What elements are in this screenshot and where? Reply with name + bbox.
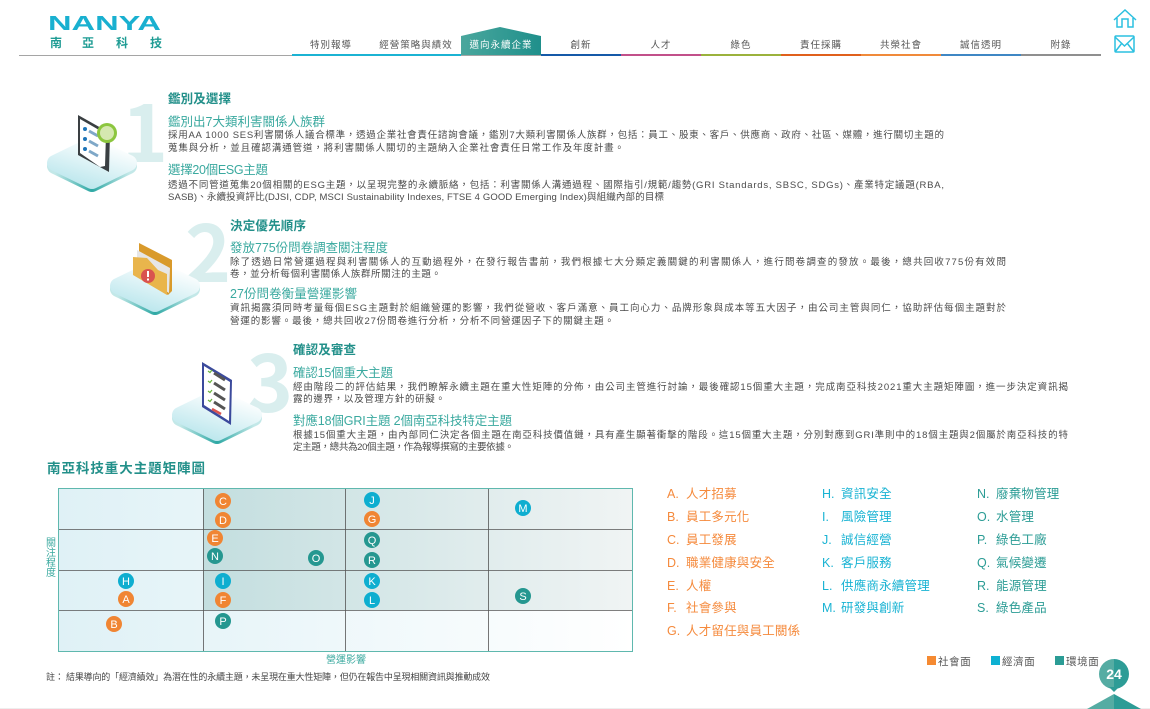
logo: [48, 13, 162, 50]
legend list: social topics: 員工發展: [686, 532, 737, 547]
legend list: economic topics: I.: [822, 510, 829, 524]
section 2: prioritise: [118, 193, 1006, 327]
bubble letters: L: [369, 595, 375, 607]
logo: NANYA: [48, 13, 161, 35]
bubble letters: D: [219, 515, 227, 527]
questionnaire text block: 除了透過日常營運過程與利害關係人的互動過程外，在發行報告書前，我們根據七大分類定義關鍵的利害關係人，進行問卷調查的發放。最後，總共回收775份有效問: [230, 256, 1006, 268]
large numeral 2: 2: [185, 193, 231, 305]
navigation bar: 特別報導: [310, 39, 352, 51]
large numeral 3: 3: [247, 323, 293, 435]
questionnaire text block: 卷，並分析每個利害關係人族群所關注的主題。: [230, 268, 441, 280]
bubble letters: F: [220, 595, 227, 607]
bubble letters: S: [519, 591, 527, 603]
icon: mail: [1115, 36, 1134, 52]
bubble letters: C: [219, 496, 227, 508]
legend list: social topics: 社會參與: [686, 600, 737, 615]
legend list: economic topics: K.: [822, 556, 834, 570]
bubble letters: O: [312, 553, 321, 565]
legend list: environmental topics: N.: [977, 487, 990, 501]
bubble letters: J: [369, 495, 375, 507]
stakeholder text block: 採用AA 1000 SES利害關係人議合標準，透過企業社會責任諮詢會議，鑑別7大類利害關係人族群，包括：員工、股東、客戶、供應商、政府、社區、媒體，進行關切主題的: [168, 129, 944, 141]
bubble letters: M: [518, 503, 528, 515]
ESG topics text block: 透過不同管道蒐集20個相關的ESG主題，以呈現完整的永續脈絡，包括：利害關係人溝通過程、國際指引/規範/趨勢(GRI Standards, SBSC, SDGs)、產業特定議題(RBA,: [168, 179, 944, 191]
bubbles: environmental: [207, 532, 531, 629]
icon: home: [1114, 10, 1136, 27]
bubble letters: P: [219, 616, 227, 628]
navigation bar: 人才: [650, 39, 672, 51]
bubble letters: A: [122, 594, 130, 606]
questionnaire text block: [230, 240, 1006, 280]
logo: 亞: [82, 36, 94, 50]
x axis label: 營運影響: [326, 653, 366, 666]
legend list: economic topics: [822, 486, 930, 615]
bubble letters: E: [211, 533, 219, 545]
y axis label: 關: [46, 537, 56, 549]
legend list: environmental topics: 綠色產品: [996, 600, 1047, 615]
page number marker: 24: [1106, 666, 1122, 682]
legend list: economic topics: 風險管理: [841, 509, 892, 524]
legend list: economic topics: 誠信經營: [841, 533, 892, 547]
colour key: 經濟面: [1002, 655, 1035, 668]
legend list: environmental topics: 能源管理: [996, 578, 1047, 593]
materiality matrix chart: [58, 488, 632, 652]
colour key: [927, 655, 1099, 668]
legend list: social topics: G.: [667, 624, 680, 638]
legend list: environmental topics: 綠色工廠: [996, 532, 1047, 547]
legend list: social topics: 人才留任與員工關係: [686, 623, 800, 638]
legend list: environmental topics: S.: [977, 601, 989, 615]
colour key: 環境面: [1066, 655, 1099, 668]
bubble letters: I: [221, 576, 225, 588]
legend list: economic topics: 研發與創新: [841, 600, 905, 615]
navigation bar: 共榮社會: [880, 39, 922, 51]
ESG topics text block: SASB)、永續投資評比(DJSI, CDP, MSCI Sustainability Indexes, FTSE 4 GOOD Emerging Index)與組織內部的目標: [168, 191, 664, 203]
bubble letters: H: [122, 576, 130, 588]
legend list: social topics: B.: [667, 510, 679, 524]
stakeholder text block: 鑑別出7大類利害關係人族群: [168, 114, 325, 129]
legend list: economic topics: H.: [822, 487, 834, 501]
bubble letters: Q: [368, 535, 377, 547]
material topics text block: 露的邊界，以及管理方針的研擬。: [293, 393, 445, 405]
legend list: environmental topics: 氣候變遷: [996, 555, 1047, 570]
heading: 鑑別及選擇: [168, 91, 231, 106]
y axis label: 注: [46, 546, 56, 559]
business impact text block: 資訊揭露須同時考量每個ESG主題對於組織營運的影響，我們從營收、客戶滿意、員工向心力、品牌形象與成本等五大因子，由公司主管與同仁，協助評估每個主題對於: [230, 302, 1006, 314]
business impact text block: 27份問卷衡量營運影響: [230, 286, 357, 301]
bubble letters: [110, 495, 528, 631]
heading: 決定優先順序: [230, 218, 306, 233]
bubbles: economic: [118, 492, 531, 608]
stakeholder text block: 蒐集與分析，並且確認溝通管道，將利害關係人關切的主題納入企業社會責任日常工作及年度計畫。: [168, 142, 624, 154]
legend list: environmental topics: [977, 486, 1060, 615]
footnote: 註： 結果導向的「經濟績效」為潛在性的永續主題，未呈現在重大性矩陣，但仍在報告中呈現相關資訊與推動成效: [46, 671, 490, 682]
colour key: 社會面: [938, 655, 971, 668]
legend list: social topics: 人權: [686, 579, 711, 593]
legend list: environmental topics: P.: [977, 533, 987, 547]
legend list: environmental topics: 水管理: [996, 509, 1034, 524]
bubble letters: B: [110, 619, 118, 631]
legend list: social topics: A.: [667, 487, 679, 501]
legend list: economic topics: J.: [822, 533, 832, 547]
questionnaire text block: 發放775份問卷調查關注程度: [230, 240, 388, 255]
legend list: economic topics: L.: [822, 579, 832, 593]
legend list: social topics: F.: [667, 601, 677, 615]
GRI topics text block: [293, 413, 1068, 453]
navigation bar: 附錄: [1050, 39, 1072, 51]
icon: platform with checklist tablet: [55, 115, 129, 184]
navigation bar: 綠色: [730, 39, 752, 51]
icon: platform with folder: [118, 243, 192, 307]
section 1: identify and select: [55, 73, 944, 203]
bubble letters: K: [368, 576, 376, 588]
material topics text block: 確認15個重大主題: [293, 365, 393, 380]
navigation bar: 誠信透明: [960, 39, 1002, 51]
navigation bar: 創新: [570, 39, 592, 51]
GRI topics text block: 定主題，總共為20個主題，作為報導撰寫的主要依據。: [293, 441, 514, 453]
bubble letters: R: [368, 555, 376, 567]
navigation bar: 責任採購: [800, 39, 842, 51]
GRI topics text block: 對應18個GRI主題 2個南亞科技特定主題: [293, 413, 512, 428]
section 3: confirm and review: [180, 323, 1068, 453]
legend list: economic topics: 供應商永續管理: [841, 578, 930, 593]
matrix title: 南亞科技重大主題矩陣圖: [47, 460, 205, 476]
stakeholder text block: [168, 114, 944, 154]
legend list: social topics: E.: [667, 579, 679, 593]
legend list: social topics: C.: [667, 533, 680, 547]
navigation bar: 邁向永續企業: [469, 39, 533, 51]
ESG topics text block: 選擇20個ESG主題: [168, 162, 268, 177]
logo: 技: [150, 35, 162, 50]
navigation bar: 經營策略與績效: [379, 39, 453, 51]
heading: 確認及審查: [293, 342, 356, 357]
legend list: economic topics: M.: [822, 601, 836, 615]
legend list: environmental topics: R.: [977, 579, 990, 593]
GRI topics text block: 根據15個重大主題，由內部同仁決定各個主題在南亞科技價值鏈，具有產生顯著衝擊的階段。這15個重大主題，分別對應到GRI準則中的18個主題與2個屬於南亞科技的特: [293, 429, 1068, 441]
business impact text block: [230, 286, 1006, 327]
logo: 科: [116, 35, 128, 50]
logo: 南: [50, 36, 62, 50]
legend list: social topics: [667, 487, 800, 638]
ESG topics text block: [168, 162, 944, 203]
legend list: social topics: 職業健康與安全: [686, 555, 775, 570]
legend list: economic topics: 客戶服務: [841, 555, 892, 570]
legend list: environmental topics: Q.: [977, 556, 990, 570]
business impact text block: 營運的影響。最後，總共回收27份問卷進行分析，分析不同營運因子下的關鍵主題。: [230, 315, 614, 327]
material topics text block: [293, 365, 1068, 405]
y axis label: [46, 537, 56, 579]
page number marker: [0, 659, 1150, 709]
navigation bar: [19, 27, 1101, 56]
legend list: social topics: D.: [667, 556, 680, 570]
legend list: social topics: 人才招募: [686, 487, 737, 501]
legend list: economic topics: 資訊安全: [841, 486, 892, 501]
material topics text block: 經由階段二的評估結果，我們瞭解永續主題在重大性矩陣的分佈，由公司主管進行討論，最後確認15個重大主題，完成南亞科技2021重大主題矩陣圖，進一步決定資訊揭: [293, 381, 1068, 393]
large numeral 1: 1: [122, 73, 168, 185]
icon: platform with clipboard: [180, 362, 254, 436]
bubble letters: G: [368, 514, 376, 526]
legend list: environmental topics: O.: [977, 510, 990, 524]
y axis label: 度: [46, 566, 56, 579]
y axis label: 程: [46, 557, 56, 569]
legend list: environmental topics: 廢棄物管理: [996, 486, 1060, 501]
bubbles: social: [106, 493, 380, 632]
legend list: social topics: 員工多元化: [686, 510, 750, 524]
bubble letters: N: [211, 551, 219, 563]
